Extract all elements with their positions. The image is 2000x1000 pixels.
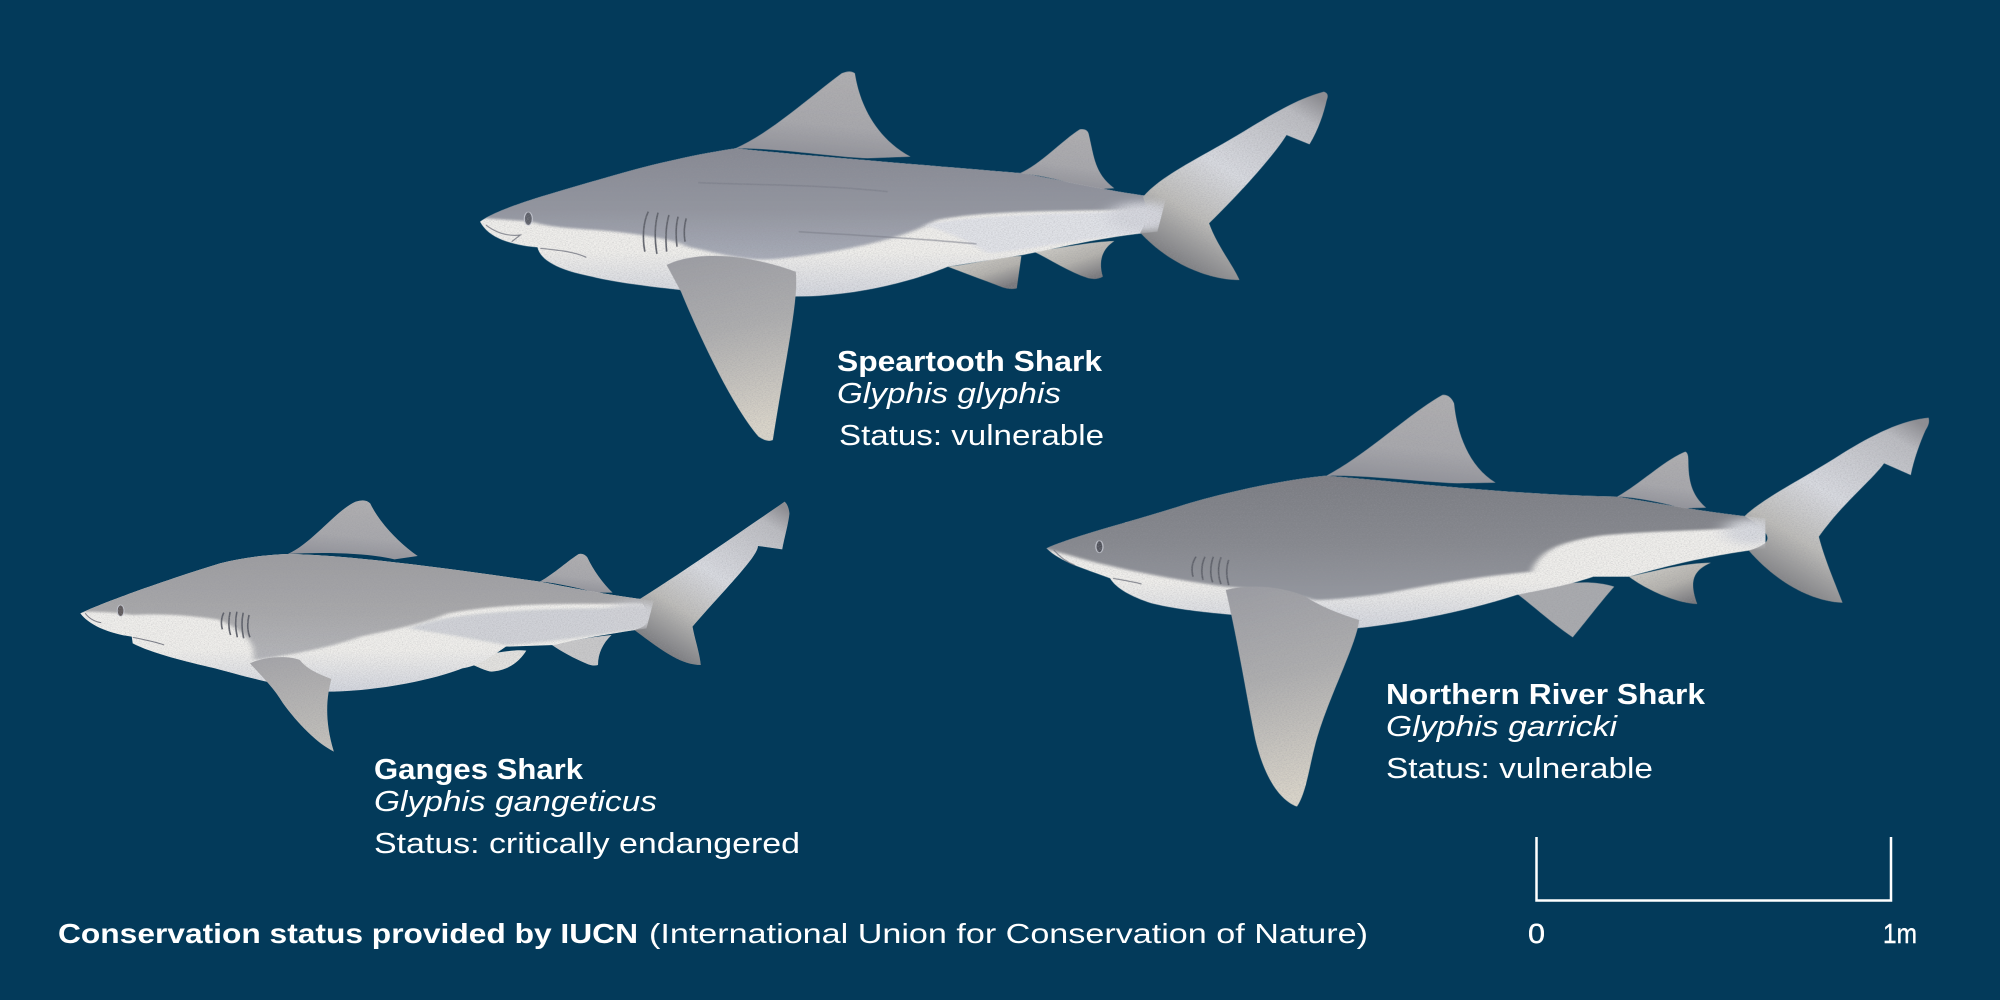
second dorsal fin (1020, 129, 1114, 189)
mouth (85, 613, 164, 645)
scale label: 0: 0 (1528, 918, 1545, 949)
lateral line (698, 183, 977, 244)
caudal fin (1745, 418, 1929, 603)
status: Status: vulnerable (839, 420, 1104, 452)
gill slits (1192, 557, 1229, 585)
eye (117, 605, 124, 616)
body (480, 148, 1166, 297)
pectoral fin (250, 657, 334, 752)
label: Speartooth Shark (837, 346, 1104, 452)
caudal fin (1140, 92, 1328, 280)
dorsal fin (1327, 395, 1496, 483)
back shading (82, 554, 644, 660)
back shading (1046, 476, 1758, 602)
illustration: Speartooth Shark (471, 72, 1328, 441)
label: Northern River Shark (1386, 679, 1706, 785)
common name: Ganges Shark (374, 754, 584, 786)
back shading (484, 148, 1146, 260)
species name: Glyphis garricki (1386, 711, 1619, 743)
common name: Speartooth Shark (837, 346, 1103, 378)
label: Ganges Shark (374, 754, 800, 860)
footnote: conservation status source (58, 918, 1368, 949)
species name: Glyphis gangeticus (374, 786, 657, 818)
second dorsal fin (540, 554, 613, 593)
pelvic fin (457, 650, 526, 672)
mouth (486, 225, 586, 257)
caudal fin (634, 502, 789, 665)
illustration: Ganges Shark (70, 500, 789, 752)
status: Status: critically endangered (374, 828, 800, 860)
eye (524, 212, 532, 225)
pelvic fin (948, 256, 1021, 289)
body (80, 554, 654, 692)
scale label: 1m: 1m (1883, 918, 1917, 949)
anal fin (1034, 241, 1114, 279)
gill slits (221, 612, 250, 638)
body (1047, 476, 1765, 628)
anal fin (552, 635, 612, 666)
illustration: Northern River Shark (1036, 395, 1929, 807)
species name: Glyphis glyphis (837, 378, 1061, 410)
caudal peduncle blend (1724, 518, 1777, 545)
eye (1096, 541, 1103, 553)
pelvic fin (1516, 582, 1614, 637)
dorsal fin (288, 500, 418, 559)
mouth (1054, 550, 1142, 584)
scale bar (1528, 837, 1917, 949)
caudal peduncle blend (610, 598, 654, 630)
footnote: conservation status source: Conservation status provided by IUCN (58, 918, 638, 949)
gill slits (643, 212, 686, 254)
anal fin (1629, 563, 1711, 604)
caudal peduncle blend (1109, 202, 1178, 232)
pectoral fin (667, 256, 796, 441)
common name: Northern River Shark (1386, 679, 1706, 711)
dorsal fin (736, 72, 911, 158)
footnote: conservation status source: (International Union for Conservation of Nature) (649, 918, 1368, 949)
status: Status: vulnerable (1386, 753, 1653, 785)
second dorsal fin (1617, 452, 1706, 508)
pectoral fin (1226, 587, 1359, 807)
